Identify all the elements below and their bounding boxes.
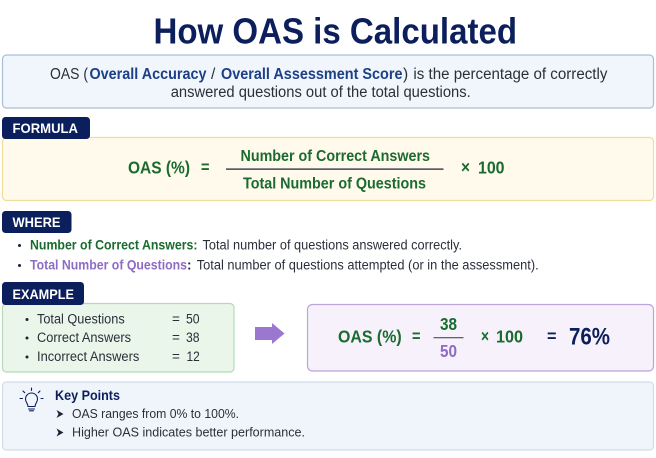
definitions list: Total Number of Questions bbox=[30, 258, 187, 272]
definitions list: Total number of questions attempted (or in the assessment). bbox=[197, 258, 539, 272]
panel: example values: = bbox=[172, 349, 180, 364]
panel: example values: = bbox=[172, 330, 180, 345]
panel: example calculation: = bbox=[412, 326, 420, 346]
panel: example calculation: 76% bbox=[569, 324, 610, 350]
definitions list bbox=[18, 238, 539, 272]
panel: key points: OAS ranges from 0% to 100%. bbox=[72, 406, 239, 421]
heading: formula: FORMULA bbox=[12, 120, 78, 136]
definitions list: Number of Correct Answers: bbox=[30, 238, 198, 252]
panel: example calculation: 38 bbox=[440, 314, 457, 334]
panel: example values: = bbox=[172, 312, 180, 326]
panel: example values: Incorrect Answers bbox=[37, 349, 140, 364]
panel: key points bbox=[2, 382, 654, 450]
panel: formula: × bbox=[461, 157, 470, 177]
panel: definition: is the percentage of correctly bbox=[413, 66, 608, 83]
title: How OAS is Calculated bbox=[154, 10, 517, 52]
panel: formula: Number of Correct Answers bbox=[240, 148, 430, 165]
panel: example calculation: = bbox=[547, 326, 556, 346]
panel: example values: Correct Answers bbox=[37, 330, 131, 345]
panel: formula: 100 bbox=[478, 158, 505, 178]
panel: example calculation: OAS (%) bbox=[338, 326, 402, 346]
panel: example values: 38 bbox=[186, 330, 200, 345]
panel: formula: OAS (%) bbox=[128, 158, 190, 178]
panel: example values: Total Questions bbox=[37, 312, 125, 326]
panel: example values: 12 bbox=[186, 349, 200, 364]
heading: where bbox=[2, 211, 72, 233]
panel: example calculation bbox=[308, 304, 654, 371]
heading: example bbox=[2, 282, 84, 305]
panel: example values: 50 bbox=[186, 312, 200, 326]
panel: definition: Overall Accuracy bbox=[90, 66, 207, 83]
panel: definition: / bbox=[211, 66, 216, 83]
panel: example values bbox=[2, 304, 234, 372]
definitions list: Total number of questions answered correctly. bbox=[202, 238, 462, 252]
arrow bbox=[255, 323, 284, 344]
panel: example calculation: × bbox=[481, 326, 489, 346]
panel: key points: Key Points bbox=[55, 387, 120, 403]
icon: light bulb bbox=[20, 388, 43, 411]
panel: example calculation: 100 bbox=[496, 326, 523, 346]
heading: formula bbox=[2, 117, 90, 139]
panel: definition bbox=[2, 55, 654, 108]
panel: formula: = bbox=[201, 157, 210, 177]
panel: definition: Overall Assessment Score bbox=[221, 66, 403, 83]
panel: example calculation: 50 bbox=[440, 341, 457, 361]
heading: where: WHERE bbox=[12, 214, 60, 230]
panel: definition: answered questions out of the total questions. bbox=[171, 84, 471, 101]
panel: definition: OAS ( bbox=[50, 66, 89, 83]
panel: key points: Higher OAS indicates better performance. bbox=[72, 424, 305, 440]
heading: example: EXAMPLE bbox=[12, 286, 74, 302]
panel: formula: Total Number of Questions bbox=[243, 176, 426, 192]
panel: definition: ) bbox=[403, 66, 408, 83]
definitions list: : bbox=[187, 258, 192, 272]
panel: formula bbox=[2, 138, 654, 200]
